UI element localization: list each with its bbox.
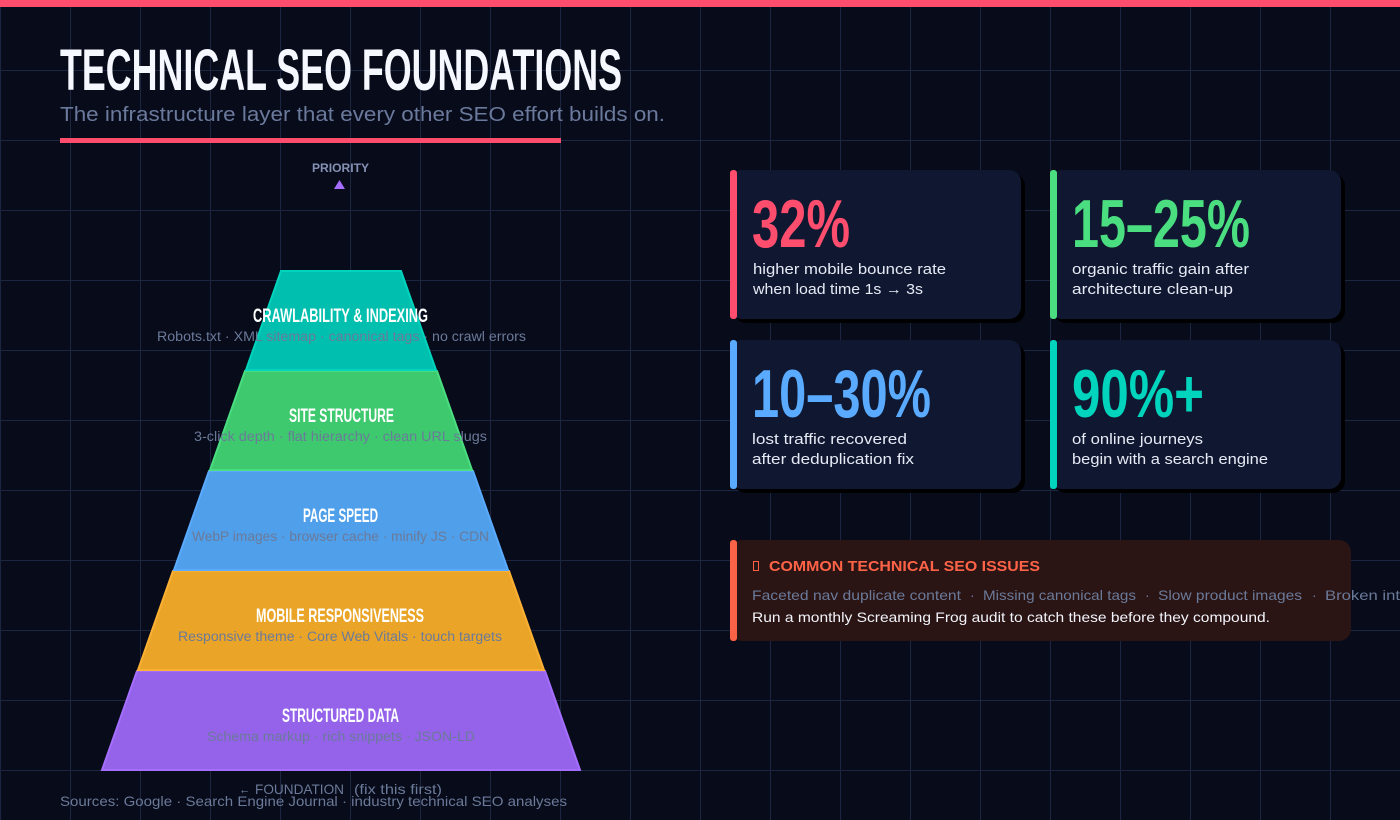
issues heading: COMMON TECHNICAL SEO ISSUES (769, 558, 1040, 575)
tier: page speed (174, 471, 508, 570)
tier: structured data (102, 671, 580, 770)
stat card: 15–25%: 15–25% (1072, 186, 1250, 262)
foundation label: FOUNDATION (255, 781, 344, 797)
stat card: 10–30% (730, 340, 1025, 493)
stat card: 10–30%: lost traffic recovered (752, 431, 907, 448)
issues list (752, 587, 1400, 603)
priority label: PRIORITY (312, 163, 369, 175)
stat card: 10–30%: 10–30% (752, 356, 931, 432)
tier: mobile responsiveness (138, 571, 544, 670)
tier: page speed: PAGE SPEED (303, 506, 378, 527)
sources: Sources: Google · Search Engine Journal · industry technical SEO analyses (60, 793, 567, 809)
stat card: 32%: 32% (752, 186, 850, 262)
foundation label: ← (239, 781, 250, 797)
tier: site structure: 3-click depth · flat hierarchy · clean URL slugs (194, 429, 487, 444)
tier: page speed: WebP images · browser cache · minify JS · CDN (192, 529, 489, 544)
subtitle: The infrastructure layer that every other SEO effort builds on. (60, 104, 665, 126)
pyramid chart (102, 271, 580, 770)
title underline (60, 138, 561, 143)
tier: mobile responsiveness: Responsive theme · Core Web Vitals · touch targets (178, 629, 502, 644)
stat card: 10–30%: after deduplication fix (752, 451, 915, 468)
stat card: 90%+: 90%+ (1072, 356, 1204, 432)
stat card: 15–25%: architecture clean-up (1072, 281, 1233, 298)
tier: mobile responsiveness: MOBILE RESPONSIVENESS (256, 606, 424, 627)
stat card: 15–25%: organic traffic gain after (1072, 261, 1249, 278)
issues list: Slow product images (1158, 587, 1302, 603)
tier: crawlability and indexing: Robots.txt · XML sitemap · canonical tags · no crawl errors (157, 329, 526, 344)
panel: common issues callout (730, 540, 1400, 641)
issues advice: Run a monthly Screaming Frog audit to catch these before they compound. (752, 609, 1270, 625)
issues list: Faceted nav duplicate content (752, 587, 961, 603)
tier: crawlability and indexing: CRAWLABILITY & INDEXING (253, 306, 428, 327)
tier: site structure: SITE STRUCTURE (289, 406, 394, 427)
issues list: · (1312, 587, 1317, 603)
icon: missing glyph box (754, 562, 758, 570)
title: TECHNICAL SEO FOUNDATIONS (60, 38, 622, 103)
tier: site structure (194, 371, 487, 470)
stat card: 32% (730, 170, 1025, 323)
icon: priority triangle (334, 180, 345, 189)
issues list: · (1145, 587, 1150, 603)
stat card: 90%+ (1050, 340, 1345, 493)
issues list: · (970, 587, 975, 603)
foundation label: (fix this first) (354, 781, 442, 797)
stat card: 90%+: begin with a search engine (1072, 451, 1268, 468)
tier: structured data: Schema markup · rich snippets · JSON-LD (207, 729, 475, 744)
priority label (312, 163, 369, 189)
issues list: Missing canonical tags (983, 587, 1136, 603)
stat card: 15–25% (1050, 170, 1345, 323)
stat card: 32%: when load time 1s → 3s (752, 281, 923, 298)
stat card: 32%: higher mobile bounce rate (753, 261, 946, 278)
stat card: 90%+: of online journeys (1072, 431, 1203, 448)
tier: crawlability and indexing (157, 271, 526, 370)
tier: structured data: STRUCTURED DATA (282, 706, 399, 727)
foundation label (239, 781, 442, 797)
